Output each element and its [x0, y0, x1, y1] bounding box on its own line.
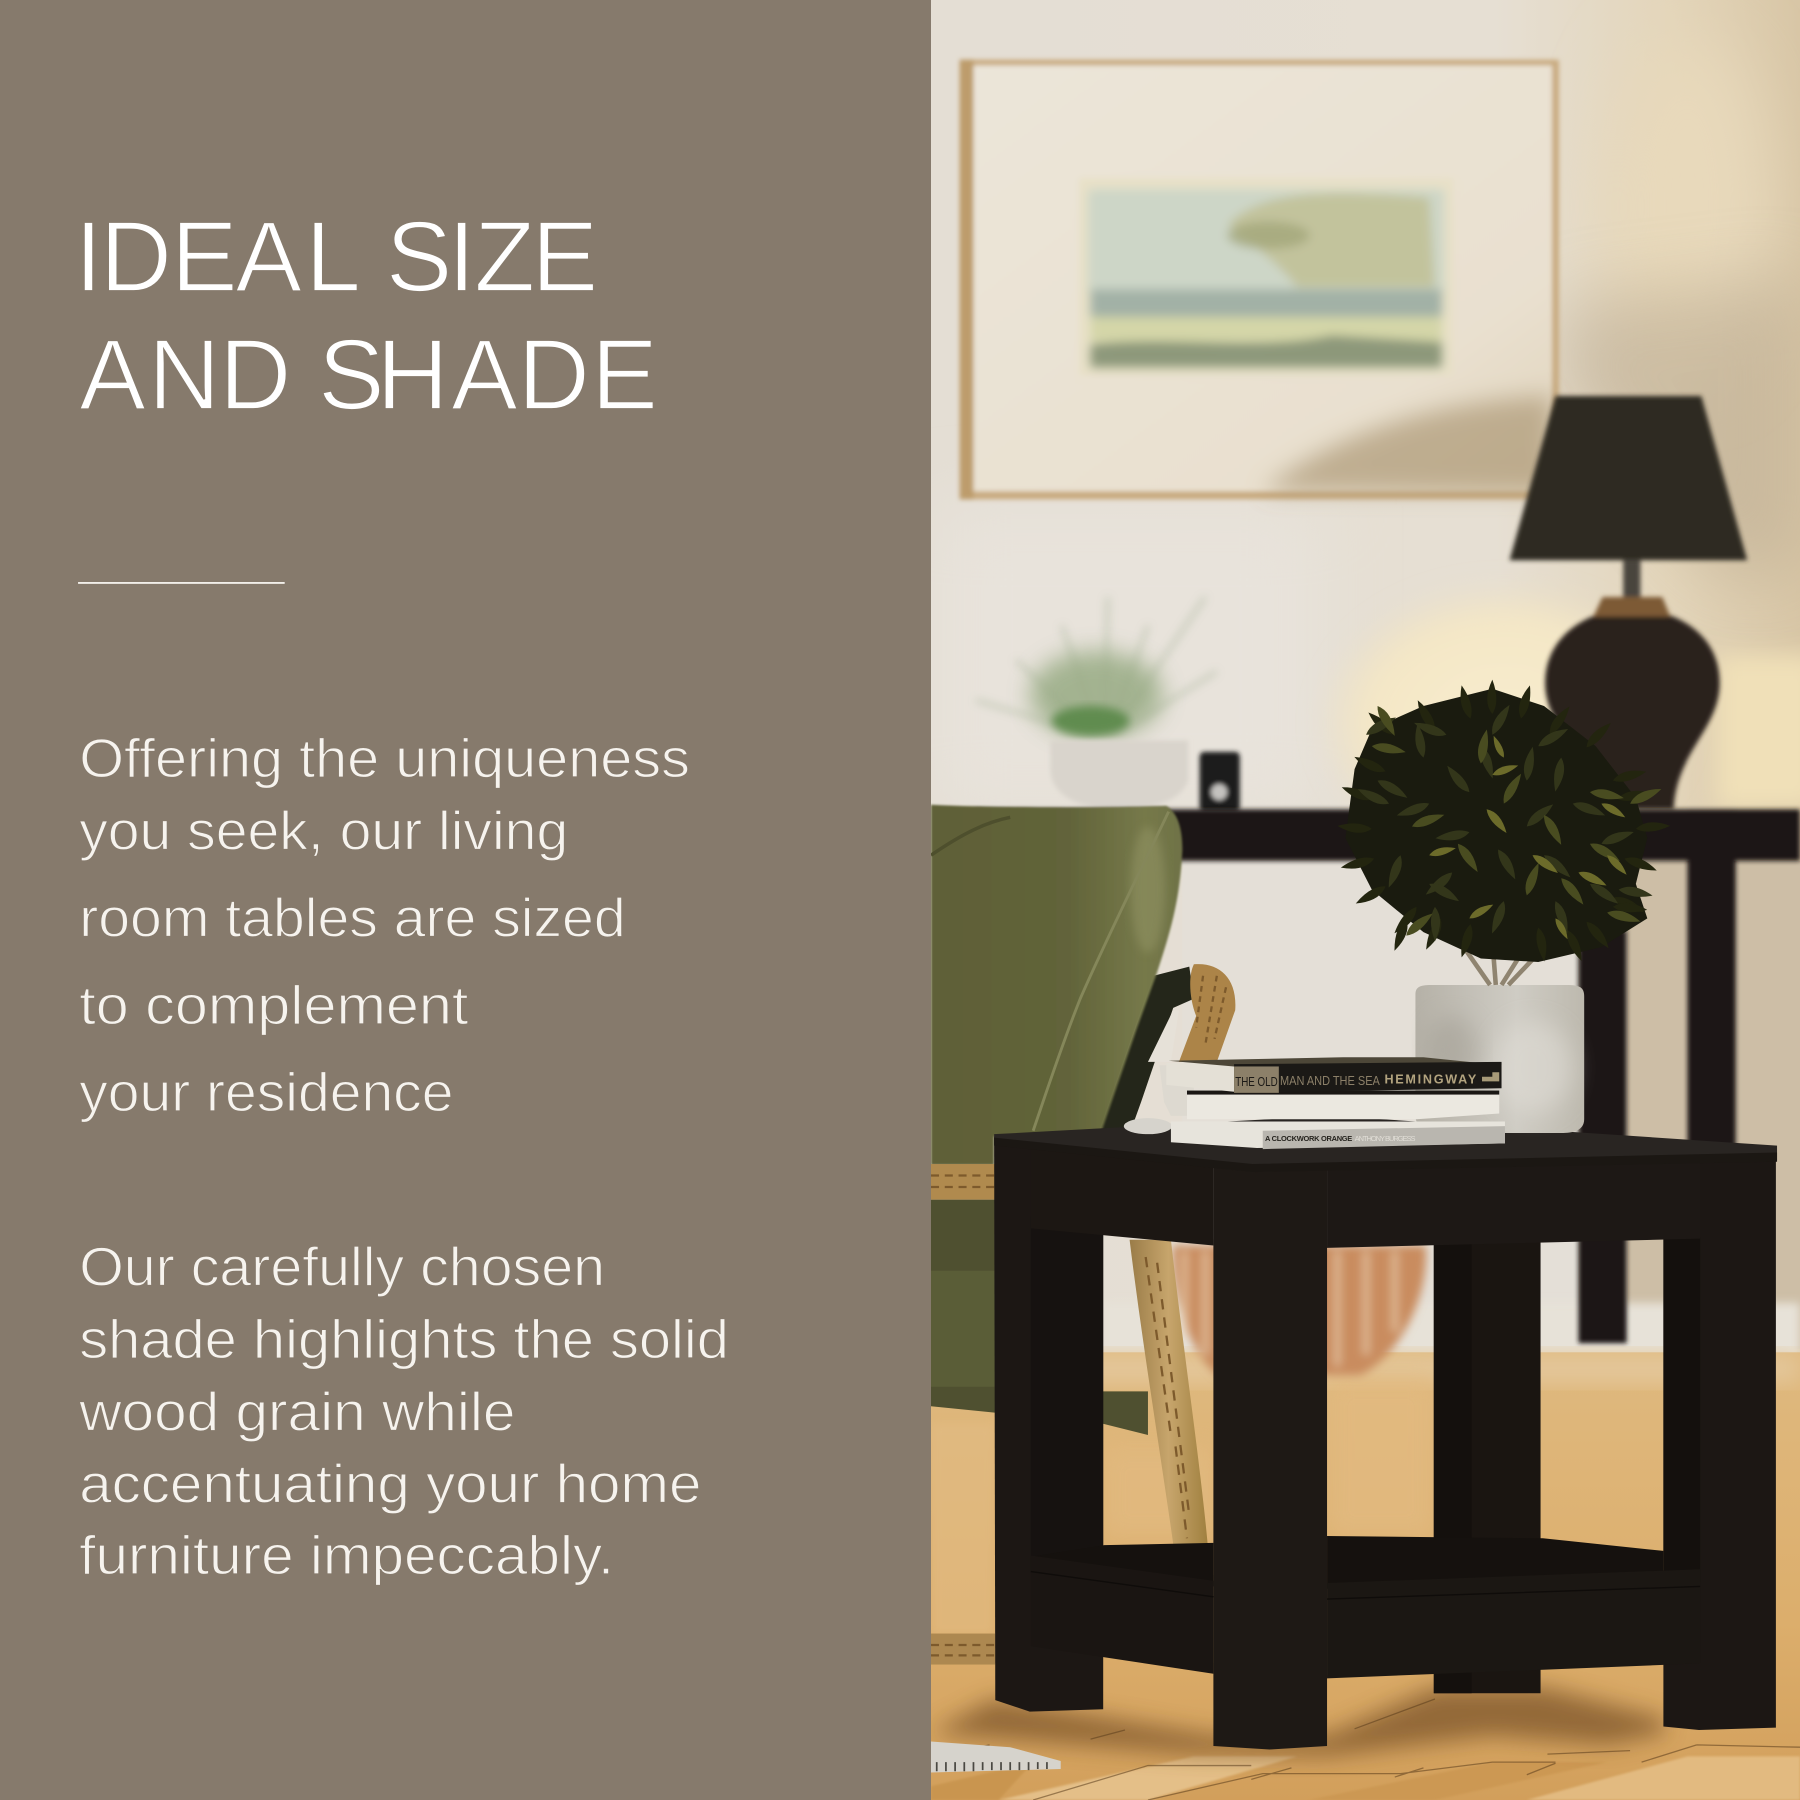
- upper apron right: [1327, 1155, 1700, 1248]
- armchair pillow: [931, 805, 1182, 1165]
- wicker armrest: [1179, 964, 1235, 1062]
- top book pages: [1166, 1063, 1234, 1092]
- armchair: [931, 805, 1235, 1665]
- middle book: [1187, 1092, 1499, 1119]
- lower shelf left: [1031, 1543, 1213, 1586]
- wicker basket: [1173, 1246, 1426, 1375]
- plant foliage: [1337, 680, 1670, 963]
- dark candle holder: [1200, 752, 1240, 812]
- wicker chair leg: [1130, 1240, 1208, 1544]
- wall art: framed landscape: [960, 60, 1559, 499]
- console table: [976, 809, 1800, 1349]
- pillow crease: [931, 817, 1010, 855]
- lamp glow: [1314, 580, 1693, 867]
- back book pages: [1159, 1065, 1194, 1116]
- lower apron right: [1327, 1569, 1700, 1678]
- background plant in bowl: [976, 597, 1217, 809]
- baseboard: [1103, 1303, 1800, 1360]
- concrete pot: [1415, 985, 1584, 1133]
- side table: [994, 1116, 1777, 1749]
- pillow highlight: [1131, 827, 1165, 953]
- front leg: [1213, 1165, 1327, 1749]
- text block: first paragraph: your residence: [79, 1061, 453, 1123]
- pillow seam: [1033, 812, 1169, 1131]
- middle book cover: [1187, 1091, 1499, 1095]
- top book spine: [1234, 1062, 1502, 1093]
- armrest frame: [1100, 967, 1194, 1131]
- wicker rail: [931, 1164, 995, 1200]
- bottom book spine: ANTHONY BURGESS: [1355, 1134, 1415, 1143]
- lower cushion: [931, 1200, 1148, 1435]
- heading: [75, 202, 658, 431]
- heading: SIZE: [386, 202, 598, 313]
- heading: IDEAL: [75, 202, 361, 313]
- text block: second paragraph: [78, 1236, 729, 1586]
- table top: [994, 1116, 1777, 1172]
- floor: [931, 1352, 1800, 1800]
- wall: [931, 0, 1800, 1378]
- text block: second paragraph: wood grain while: [78, 1380, 515, 1442]
- wall under console: [1182, 861, 1578, 1309]
- glow right of lamp: [1716, 654, 1800, 809]
- top book spine: MAN AND THE SEA: [1280, 1073, 1380, 1088]
- text block: first paragraph: to complement: [79, 974, 468, 1036]
- lamp: [1510, 396, 1747, 809]
- floor plank seams: [953, 1699, 1800, 1800]
- armrest wall gap: [1148, 1010, 1179, 1062]
- heading divider: [78, 582, 285, 584]
- top book spine: HEMINGWAY: [1384, 1073, 1477, 1087]
- text block: second paragraph: Our carefully chosen: [79, 1236, 605, 1298]
- top book cover: [1169, 1057, 1502, 1066]
- text block: first paragraph: Offering the uniqueness: [79, 727, 690, 789]
- lower apron left: [1031, 1555, 1213, 1674]
- left leg: [994, 1136, 1103, 1712]
- lower cushion seat: [931, 1271, 999, 1387]
- bottom book pages: [1171, 1122, 1505, 1148]
- lower rail seams: [1031, 1572, 1700, 1599]
- top book spine: THE OLD: [1235, 1074, 1278, 1089]
- bottom book spine: [1263, 1126, 1505, 1149]
- text block: first paragraph: you seek, our living: [79, 799, 568, 861]
- rug: [931, 1741, 1061, 1772]
- upper apron left: [1031, 1146, 1213, 1246]
- text block: second paragraph: shade highlights the solid: [79, 1308, 729, 1370]
- bottom book spine: A CLOCKWORK ORANGE: [1265, 1134, 1352, 1143]
- panel: text background: [0, 0, 931, 1800]
- text block: first paragraph: room tables are sized: [79, 887, 626, 949]
- lower wicker rail: [931, 1634, 995, 1665]
- saucer: [1124, 1118, 1172, 1134]
- heading: SHADE: [318, 320, 658, 431]
- lower shelf right: [1327, 1536, 1663, 1589]
- plant stems: [1464, 936, 1550, 985]
- text block: second paragraph: furniture impeccably.: [79, 1524, 614, 1586]
- heading: AND: [79, 320, 291, 431]
- table floor shadow: [931, 1688, 1665, 1756]
- right leg: [1663, 1157, 1776, 1730]
- text block: second paragraph: accentuating your home: [79, 1453, 701, 1515]
- back leg: [1434, 1234, 1541, 1693]
- photo: living room scene: [931, 0, 1800, 1800]
- table top edge: [994, 1138, 1777, 1172]
- book stack: [1159, 1057, 1505, 1149]
- text block: first paragraph: [79, 727, 690, 1123]
